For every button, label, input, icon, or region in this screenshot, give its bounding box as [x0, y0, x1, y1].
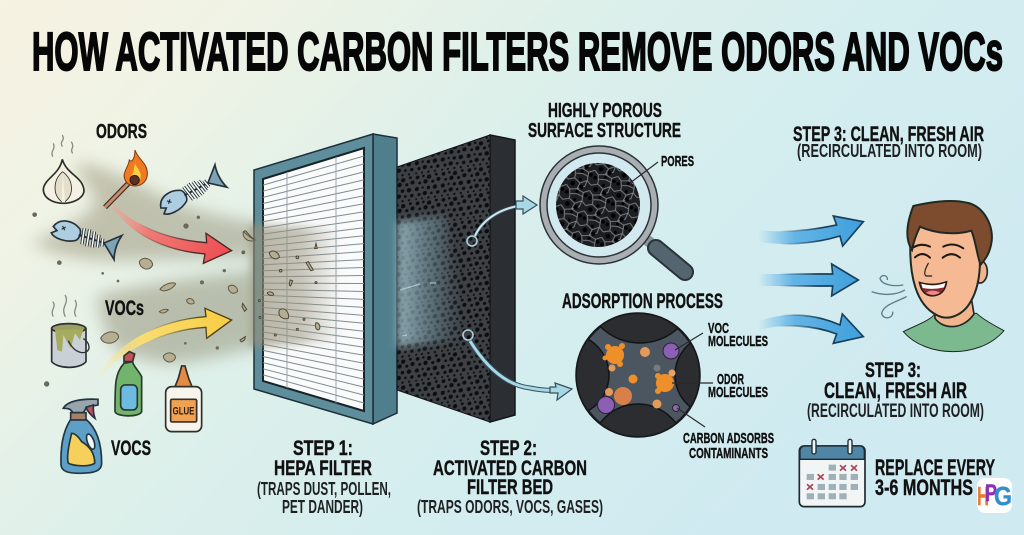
neck: [935, 300, 974, 327]
label: odor molecules: MOLECULES: [708, 384, 768, 401]
smoke passing through HEPA: [250, 224, 342, 348]
heading: highly porous surface structure: SURFACE STRUCTURE: [528, 120, 681, 142]
arrow lower: [758, 314, 863, 343]
icon: burning match: [105, 150, 147, 207]
icon: cleaner bottle: [115, 352, 142, 416]
text: step 1: (TRAPS DUST, POLLEN,: [257, 479, 391, 499]
label: VOC molecules: MOLECULES: [708, 333, 768, 350]
callout marker upper: [467, 236, 477, 246]
clean air haze: [397, 214, 464, 347]
label: carbon adsorbs contaminants: CONTAMINANTS: [689, 445, 768, 462]
logo badge: P: [985, 480, 997, 507]
HEPA frame side: [373, 134, 397, 424]
text: step 1: STEP 1:: [293, 437, 353, 460]
label: pores: PORES: [661, 153, 694, 170]
text: step 3 top: [793, 123, 984, 161]
text: step 3 lower: CLEAN, FRESH AIR: [824, 378, 967, 403]
face: [910, 223, 980, 318]
callout marker lower: [463, 330, 473, 340]
adsorption diagram: [575, 312, 701, 438]
text: step 1: HEPA FILTER: [274, 457, 372, 480]
arrow middle: [758, 264, 858, 296]
icon: fish skeleton upper: [155, 165, 227, 219]
wind swirls: [872, 276, 907, 318]
label: odor molecules: ODOR: [717, 371, 744, 388]
HEPA frame front: [254, 134, 373, 424]
label: VOCs: VOCs: [105, 297, 144, 320]
icon: paint can: [52, 295, 89, 367]
logo badge: G: [994, 481, 1012, 511]
particles: [240, 231, 320, 342]
label: VOC molecules: VOC: [708, 320, 729, 337]
text: step 1: [257, 437, 391, 517]
text: replace every 3-6 months: 3-6 MONTHS: [875, 475, 973, 500]
heading: highly porous surface structure: HIGHLY POROUS: [548, 100, 662, 122]
label: VOCS: VOCS: [111, 437, 151, 460]
heading: highly porous surface structure: [528, 100, 681, 142]
facial features: [913, 245, 963, 296]
text: step 3 lower: STEP 3:: [865, 359, 921, 382]
smoke stream: [32, 163, 260, 363]
dust blobs: [101, 232, 255, 362]
odor arrow: [98, 180, 232, 263]
icon: smiling person: [872, 201, 1004, 352]
label: VOC molecules: [675, 320, 768, 350]
clean air arrows: [758, 216, 863, 343]
shirt: [903, 313, 1004, 352]
logo badge: [977, 478, 1012, 513]
icon: garlic: [43, 135, 84, 203]
logo badge: H: [977, 481, 989, 511]
carbon side: [490, 135, 515, 422]
callout arrow to porous surface: [475, 196, 537, 236]
text: step 3 lower: [807, 359, 984, 422]
icon: magnifying glass: [540, 146, 685, 272]
text: step 2: (TRAPS ODORS, VOCS, GASES): [417, 497, 603, 517]
text: step 1: PET DANDER): [282, 497, 363, 517]
label: carbon adsorbs contaminants: [677, 408, 774, 462]
stray dust dots: [32, 212, 245, 387]
text: step 2: FILTER BED: [467, 476, 553, 499]
carbon front: [397, 135, 490, 422]
icon: glue bottle: [166, 366, 202, 432]
text: step 2: STEP 2:: [480, 437, 537, 460]
text: step 2: [417, 437, 603, 517]
ear: [973, 260, 987, 283]
panel: highly porous surface: [528, 100, 694, 272]
VOC arrow: [95, 308, 232, 382]
text: replace every 3-6 months: [875, 455, 995, 500]
label: odor molecules: [672, 371, 768, 401]
icon: glue bottle: GLUE: [173, 406, 195, 418]
icon: spray bottle: [61, 399, 102, 473]
panel: adsorption process: [562, 293, 774, 458]
label: ODORS: ODORS: [96, 121, 147, 143]
panel: odors and VOCs sources: [32, 135, 255, 473]
icon: calendar: [799, 439, 865, 507]
panel: activated carbon filter: [397, 135, 515, 422]
hair: [907, 201, 992, 265]
text: step 2: ACTIVATED CARBON: [433, 457, 587, 480]
HEPA pleats: [263, 148, 364, 411]
callout arrow to adsorption: [470, 341, 572, 400]
panel: HEPA filter: [254, 134, 397, 424]
icon: fish skeleton lower: [49, 214, 122, 260]
arrow upper: [758, 216, 863, 246]
label: pores: [630, 153, 694, 183]
label: carbon adsorbs contaminants: CARBON ADSORBS: [683, 430, 774, 447]
heading: adsorption process: ADSORPTION PROCESS: [562, 290, 723, 313]
